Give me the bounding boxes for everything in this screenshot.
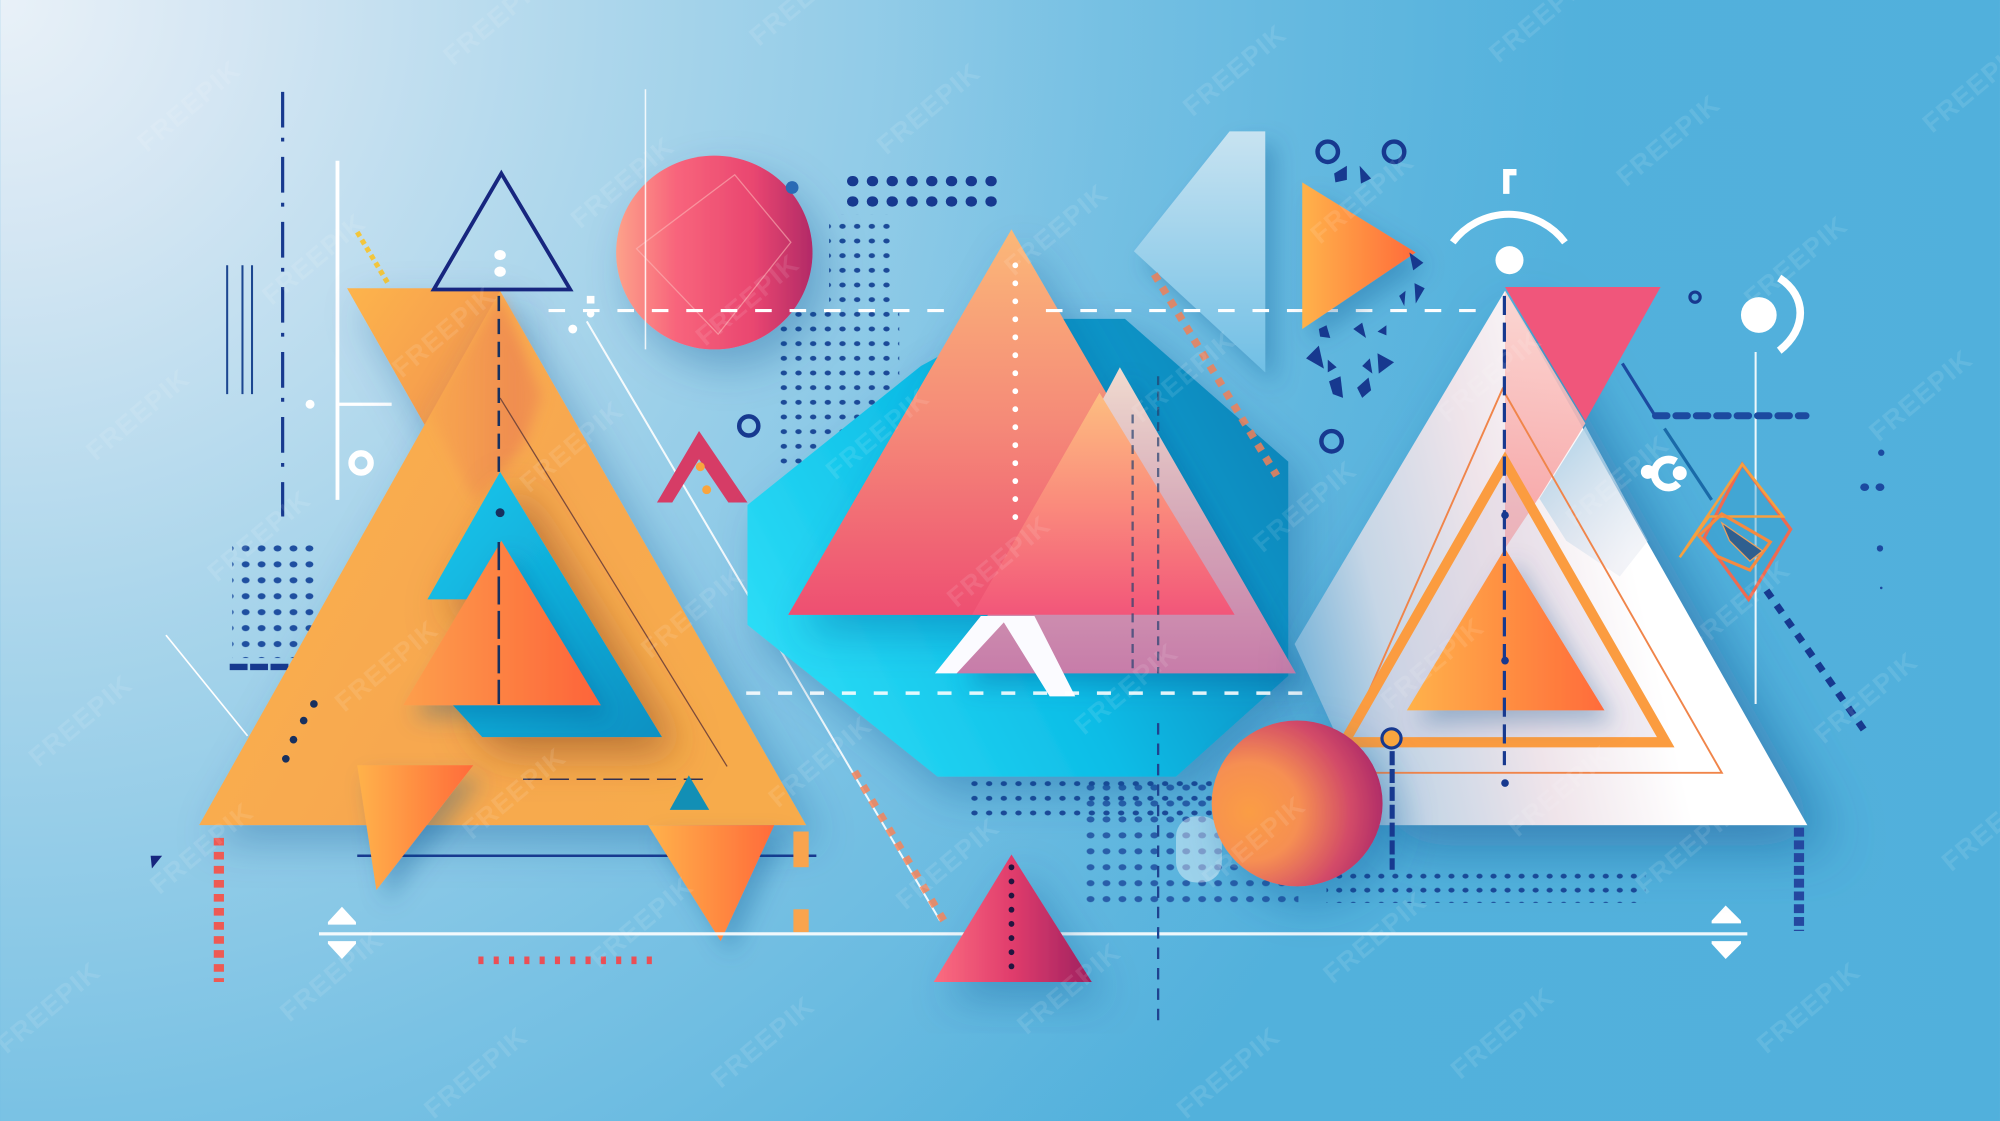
red dashed vertical [215,838,223,982]
yellow dashed line [357,232,388,283]
main orange triangle [199,291,806,825]
watermark text: FREEPIK [1305,146,1420,249]
dark dashed horizontal [523,778,708,780]
watermark text: FREEPIK [1751,956,1866,1059]
watermark text: FREEPIK [329,614,444,717]
white dotted blob [1176,816,1222,883]
navy dots far right [1860,450,1884,589]
bottom red triangle [934,854,1092,982]
thin diagonal [500,398,727,766]
red dashed horizontal [478,957,662,963]
thin white line left [166,635,248,736]
watermark text: FREEPIK [1808,646,1923,749]
watermark text: FREEPIK [1432,325,1547,428]
watermark text: FREEPIK [256,207,371,311]
white dashed horizontal lower [746,692,1333,695]
watermark text: FREEPIK [890,812,1005,915]
white diagonal line [587,321,940,921]
navy dashes left [230,664,322,669]
inner orange triangle [1407,548,1604,710]
circle [1212,721,1383,886]
cyan triangle [427,472,662,737]
white vertical line right [1755,352,1757,704]
watermark text: FREEPIK [1375,612,1490,715]
pale blue wedge [1539,426,1648,576]
pale blue triangle [1134,131,1265,372]
white dashed horizontal upper [549,309,1492,312]
navy vertical dash-dot line [281,92,284,517]
navy tick left [151,856,162,868]
watermark text: FREEPIK [871,57,986,160]
centre triangle group [747,230,1296,777]
dot rows: lower right [1326,872,1645,903]
watermark text: FREEPIK [705,990,820,1094]
back orange triangle [347,288,500,504]
white scattered dots [568,296,594,333]
navy shards [1306,166,1425,398]
watermark text: FREEPIK [941,510,1056,613]
dot grid: upper centre [778,214,899,469]
watermark text: FREEPIK [763,710,878,813]
cyan octagon [747,319,1288,777]
icon: white dot and arc right [1741,278,1800,351]
watermark text: FREEPIK [1863,344,1978,447]
dot grid: left [232,537,318,658]
watermark text: FREEPIK [584,871,699,974]
watermark text: FREEPIK [1247,455,1362,558]
lower-left orange triangle [357,765,473,890]
dot rows: top centre [852,181,1010,201]
watermark text: FREEPIK [1630,797,1745,900]
orange play triangle [1302,182,1416,329]
watermark text: FREEPIK [1681,554,1796,658]
navy horizontal line [357,855,816,857]
front small triangle [972,393,1235,615]
navy outline triangle [434,173,570,289]
thick orange outline triangle [1344,462,1666,742]
watermark text: FREEPIK [635,561,750,664]
orange dashed diagonal upper [1154,274,1277,476]
navy dashes centre [1133,376,1158,673]
watermark text: FREEPIK [690,248,805,351]
icon: white arc with dot and flag [1453,172,1565,274]
orange-magenta circle [1176,721,1383,886]
icon: overlapping diamonds [1680,464,1791,599]
watermark text: FREEPIK [1611,89,1726,192]
watermark text: FREEPIK [23,669,138,772]
watermark text: FREEPIK [80,363,195,466]
right arrow heads [1712,905,1741,923]
join to large triangle [788,230,1099,615]
watermark text: FREEPIK [1069,637,1184,740]
teal mini triangle [670,775,709,810]
red circle [616,156,813,349]
navy rings [1318,142,1404,451]
dashed orange line lower [855,772,948,927]
left triangle group [199,288,806,825]
pale pink wedge [1505,291,1585,548]
watermark text: FREEPIK [202,484,317,587]
dot grid: lower centre [969,780,1298,908]
icon: white gear arrows [1645,460,1683,488]
navy centre dot [496,508,505,517]
axis end dots [1501,511,1509,787]
white horizontal line with arrows [319,905,1747,959]
thin orange outline triangle [1333,389,1722,773]
right triangle group [1295,287,1807,825]
translucent pale triangle [957,367,1296,673]
watermark text: FREEPIK [457,742,572,845]
watermark text: FREEPIK [386,280,501,383]
white bracket lines [337,161,392,500]
white vertical line by circle [644,89,646,349]
watermark text: FREEPIK [1196,790,1311,893]
white dot and ring [306,400,371,473]
red chevron [657,431,747,502]
navy angled line with dashes [1622,363,1806,500]
navy triple vertical lines [227,265,252,394]
white dots in outline triangle [494,250,506,277]
watermark text: FREEPIK [1738,210,1853,313]
navy dashed vertical bottom right [1795,828,1803,931]
watermark text: FREEPIK [999,178,1114,281]
pink triangle [1505,287,1661,421]
overlap shade [427,296,542,500]
watermark text: FREEPIK [514,395,629,498]
small navy dot [786,181,799,194]
small navy ring right [1690,292,1700,302]
inner orange-red triangle [403,541,601,705]
watermark text: FREEPIK [131,54,246,158]
large gradient triangle [788,230,1235,615]
navy dashed vertical lower [1157,723,1159,1020]
watermark text: FREEPIK [1177,19,1292,122]
left arrow heads [328,907,356,925]
watermark text: FREEPIK [1560,429,1675,533]
watermark text: FREEPIK [1445,981,1560,1085]
lower-right orange triangle [648,825,774,941]
watermark text: FREEPIK [820,382,935,485]
orange blocks [793,832,809,932]
watermark text: FREEPIK [1126,325,1241,428]
watermark text: FREEPIK [1011,937,1126,1040]
centre dashes lower [498,542,500,704]
navy dashed diagonal right [1766,590,1867,735]
navy dot diagonal [282,700,318,763]
white large triangle [1295,291,1807,825]
watermark text: FREEPIK [565,131,680,234]
navy dashed axis [1503,296,1506,765]
white dotted vertical [1013,265,1018,533]
orange chevron dots [696,462,711,494]
watermark text: FREEPIK [1317,886,1432,989]
white chevron [935,616,1075,696]
ring with navy dashes [1382,729,1401,870]
watermark text: FREEPIK [1502,739,1617,842]
navy centre dashes [498,296,500,474]
navy ring left of octagon [739,416,758,436]
watermark text: FREEPIK [144,797,259,900]
watermark text: FREEPIK [274,924,389,1027]
